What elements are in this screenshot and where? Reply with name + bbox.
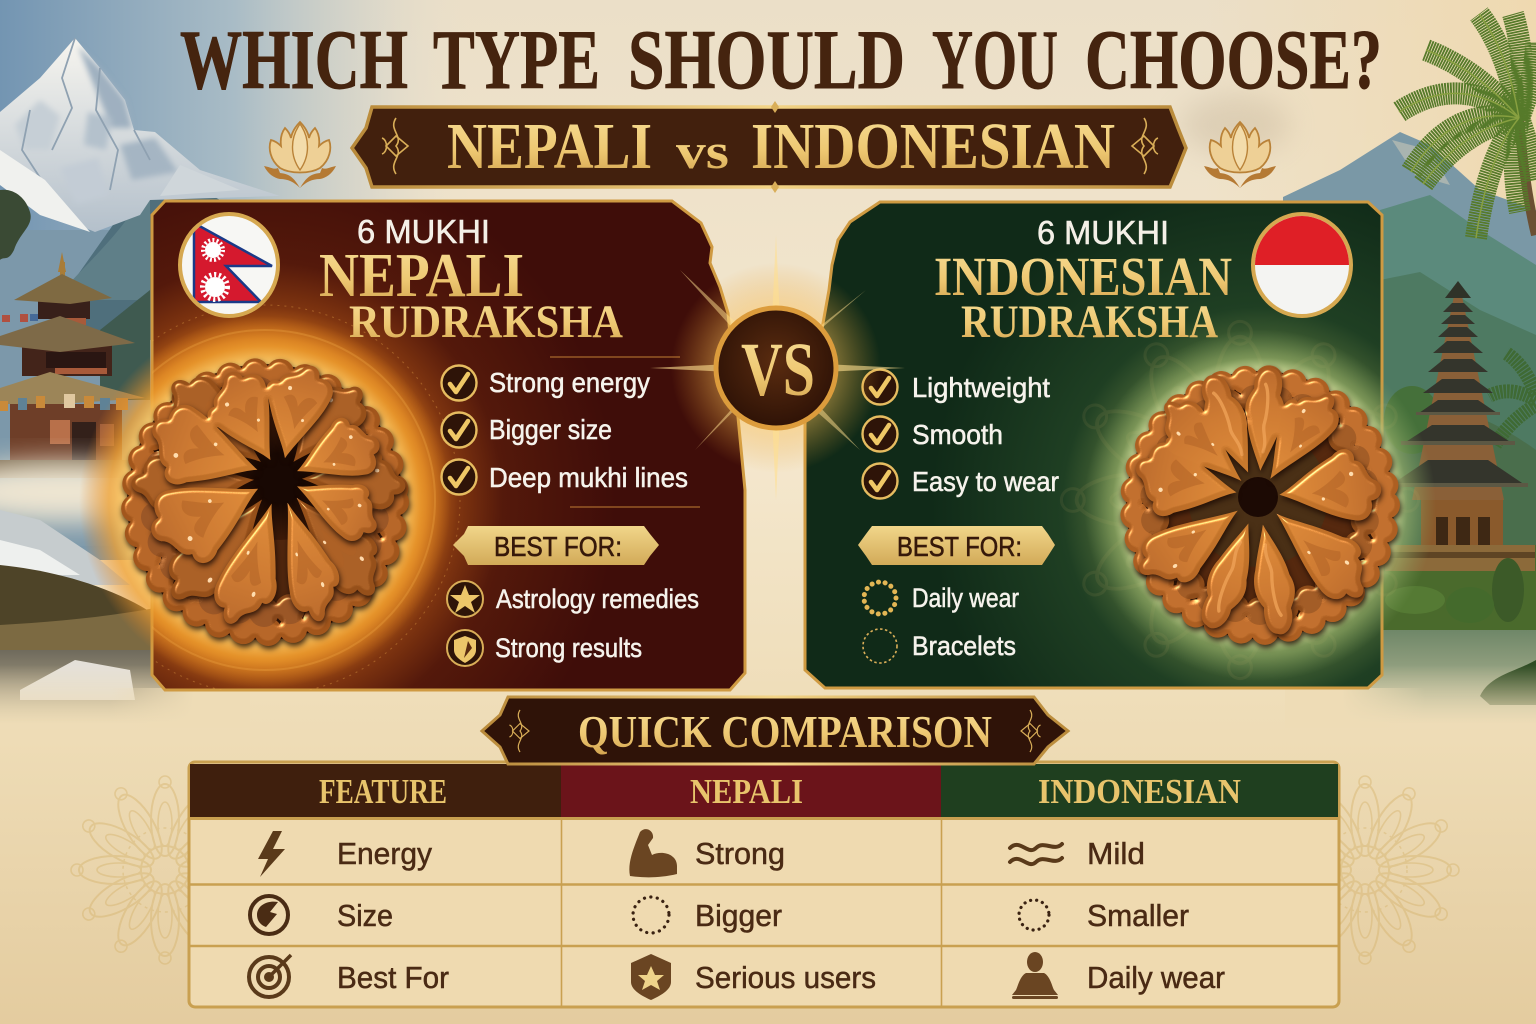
comparison table	[189, 762, 1339, 1007]
use: astrology remedies	[447, 581, 699, 617]
feature list: Easy to wear	[912, 466, 1059, 497]
row: best for: Best For	[337, 960, 449, 995]
snowy peak	[0, 38, 280, 232]
bead halo	[1084, 329, 1436, 681]
icon: size badge	[250, 896, 288, 934]
row: best for: Daily wear	[1087, 960, 1225, 995]
header indonesian	[941, 764, 1338, 818]
title	[180, 13, 1382, 107]
lake	[0, 650, 177, 714]
blue ridge	[78, 198, 219, 340]
feature list: Deep mukhi lines	[489, 462, 688, 493]
feature list: Smooth	[912, 419, 1003, 450]
prayer flags	[0, 396, 128, 411]
banner: quick comparison	[482, 697, 1068, 764]
feature list	[442, 366, 688, 494]
use: daily wear: Daily wear	[912, 583, 1019, 613]
banner: quick comparison: QUICK COMPARISON	[578, 706, 992, 757]
palm tree	[1399, 14, 1536, 238]
landscape: Indonesia side	[1283, 14, 1536, 730]
row: size: Smaller	[1087, 898, 1189, 933]
heading text: RUDRAKSHA	[349, 296, 623, 348]
header indonesian: INDONESIAN	[1038, 772, 1241, 811]
feature list: Lightweight	[912, 372, 1050, 403]
panel shape	[152, 201, 745, 690]
use: strong results: Strong results	[495, 633, 642, 663]
feature list: Bigger size	[489, 414, 612, 445]
VS medallion	[650, 235, 905, 500]
best for badge	[453, 526, 659, 565]
use: strong results	[447, 630, 642, 666]
heading text	[934, 214, 1232, 348]
title: CHOOSE?	[1085, 13, 1382, 107]
best for badge: BEST FOR:	[897, 531, 1022, 562]
banner heading: vs	[676, 123, 729, 179]
banner: Nepali vs Indonesian	[352, 101, 1186, 193]
far mountains	[1283, 132, 1536, 265]
heading text: 6 MUKHI	[357, 213, 490, 250]
row: size: Size	[337, 898, 393, 933]
heading text: 6 MUKHI	[1037, 214, 1169, 251]
heading text: INDONESIAN	[934, 246, 1232, 307]
pagoda: Indonesian temple	[1385, 281, 1535, 571]
header feature: FEATURE	[319, 772, 447, 811]
best for badge: BEST FOR:	[494, 531, 622, 562]
row: best for: Serious users	[695, 960, 876, 995]
hill	[0, 565, 146, 625]
pagoda: Nepal temple	[0, 252, 145, 478]
heading text: RUDRAKSHA	[961, 296, 1218, 348]
garden	[1380, 545, 1536, 632]
foot fade left	[110, 688, 250, 728]
flag: Nepal	[180, 214, 278, 316]
VS medallion: VS	[741, 328, 815, 412]
row: energy: Energy	[337, 836, 432, 871]
row: size	[250, 896, 1189, 934]
bushes	[1384, 386, 1433, 454]
title: TYPE	[433, 13, 600, 107]
row: energy: Strong	[695, 836, 785, 871]
lake	[1358, 630, 1536, 715]
title: YOU	[932, 13, 1058, 107]
sky left	[0, 0, 470, 330]
tree	[0, 190, 31, 260]
feature list: Strong energy	[489, 367, 650, 398]
icon: dotted circle big	[633, 897, 669, 933]
icon: shield star	[631, 954, 671, 1000]
panel shape	[805, 202, 1382, 688]
title: WHICH	[180, 13, 408, 107]
mist	[0, 462, 190, 522]
row: energy	[258, 829, 1145, 877]
panel: Indonesian rudraksha	[805, 202, 1436, 688]
tree clumps	[1492, 558, 1524, 622]
title: SHOULD	[628, 13, 905, 107]
row: best for	[249, 952, 1225, 1000]
row: energy: Mild	[1087, 836, 1145, 871]
decorative mandala left	[71, 776, 259, 964]
icon: waves	[1010, 844, 1062, 864]
panel: Nepali rudraksha	[70, 201, 745, 695]
best for badge	[858, 526, 1055, 565]
divider	[550, 357, 700, 507]
use: astrology remedies: Astrology remedies	[496, 584, 699, 614]
glow rings	[152, 304, 460, 690]
feature list	[862, 370, 1059, 498]
bead halo	[79, 316, 451, 688]
icon: target	[249, 955, 291, 997]
banner heading: NEPALI	[447, 110, 652, 183]
icon: dotted circle small	[1019, 900, 1049, 930]
header nepali	[561, 764, 941, 818]
icon: arm	[629, 829, 677, 877]
heading text	[319, 213, 623, 348]
use: bracelets	[863, 629, 1016, 663]
sky right	[1200, 0, 1536, 300]
banner heading: INDONESIAN	[751, 110, 1115, 183]
decorative mandala right	[1271, 776, 1459, 964]
haze behind banner	[1180, 95, 1290, 155]
heading text: NEPALI	[319, 242, 524, 310]
rudraksha bead: Indonesian	[1126, 365, 1394, 639]
header feature	[190, 764, 561, 818]
lotus right	[1204, 122, 1276, 188]
row: size: Bigger	[695, 898, 782, 933]
rudraksha bead: Nepali	[127, 356, 407, 640]
table body	[189, 762, 1339, 1007]
flag: Indonesia	[1250, 214, 1354, 316]
lotus left	[264, 122, 336, 188]
icon: bolt	[258, 831, 285, 877]
faint mandala	[1061, 321, 1419, 679]
icon: meditating figure	[1012, 952, 1058, 999]
landscape: Nepal side	[0, 38, 280, 730]
island	[1480, 660, 1536, 705]
foot fade right	[1285, 688, 1425, 728]
banner heading	[447, 110, 1115, 183]
forest slope	[100, 290, 150, 400]
use: daily wear	[864, 582, 1019, 614]
use: bracelets: Bracelets	[912, 631, 1016, 661]
header nepali: NEPALI	[690, 772, 803, 811]
small palm	[1489, 353, 1536, 445]
lower snow ridge	[0, 510, 130, 585]
